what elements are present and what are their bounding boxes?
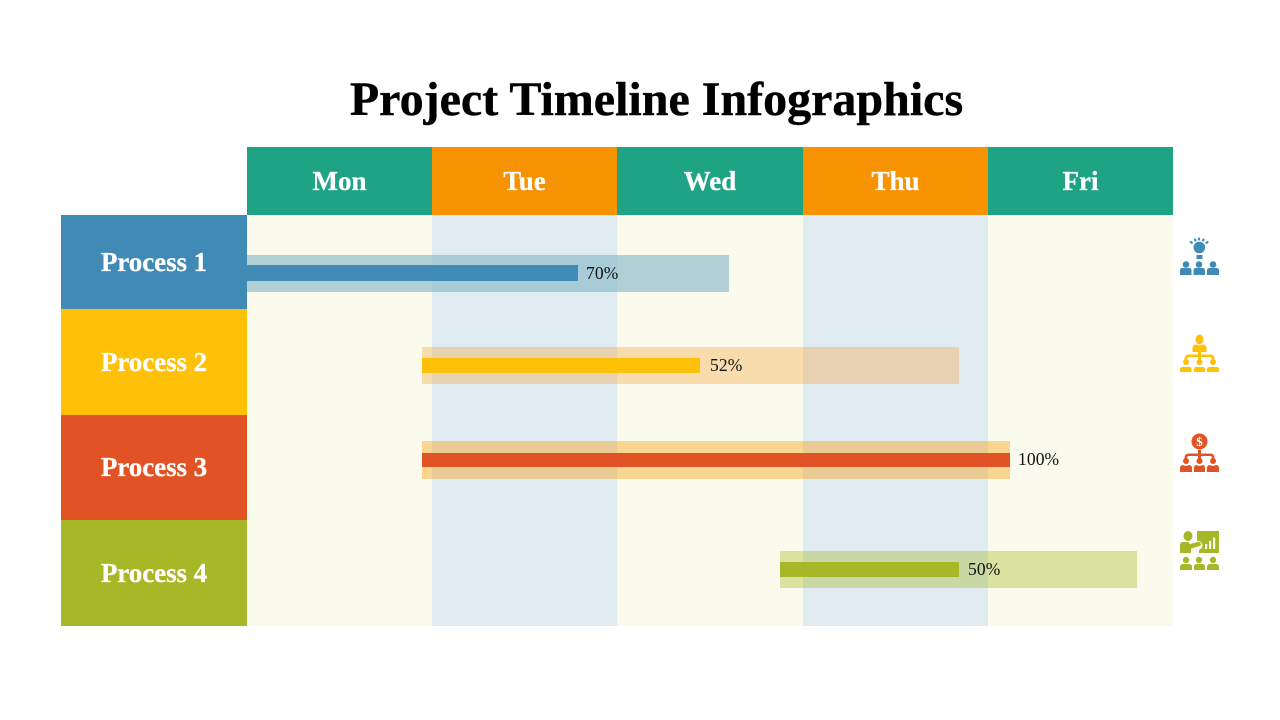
header: Thu xyxy=(803,147,988,215)
row label: Process 3 xyxy=(61,415,247,520)
Process 2 progress bar xyxy=(422,358,700,373)
timeline grid background xyxy=(247,215,1173,626)
header: Wed: Wed xyxy=(684,166,736,196)
icon: lightbulb over team xyxy=(1180,237,1219,275)
row label: Process 2 xyxy=(61,309,247,415)
Process 4 progress bar xyxy=(780,562,959,577)
header: Fri xyxy=(988,147,1173,215)
icon: presenter with chart and audience xyxy=(1180,531,1219,570)
Process 3 planned bar xyxy=(422,441,1010,479)
Process 1 planned bar xyxy=(247,255,729,292)
row label: Process 1: Process 1 xyxy=(101,246,207,276)
header: Mon xyxy=(247,147,432,215)
Process 1 progress bar xyxy=(247,265,578,281)
header: Wed xyxy=(617,147,803,215)
Process 4 percentage: 50% xyxy=(968,559,1000,579)
Process 1 percentage: 70% xyxy=(586,263,618,283)
row label: Process 4 xyxy=(61,520,247,626)
icon: hierarchy of people xyxy=(1180,334,1219,372)
row label: Process 3: Process 3 xyxy=(101,452,207,482)
Process 3 progress bar xyxy=(422,453,1010,467)
Process 2 planned bar xyxy=(422,347,959,384)
header: Mon: Mon xyxy=(312,166,366,196)
Process 2 percentage: 52% xyxy=(710,355,742,375)
header: Tue: Tue xyxy=(503,166,546,196)
header: Fri: Fri xyxy=(1062,166,1098,196)
header: Thu: Thu xyxy=(871,166,920,196)
Process 4 planned bar xyxy=(780,551,1137,588)
row label: Process 1 xyxy=(61,215,247,309)
Tuesday column stripe xyxy=(432,215,617,626)
icon: dollar hierarchy xyxy=(1180,434,1219,472)
header: Tue xyxy=(432,147,617,215)
Process 3 percentage: 100% xyxy=(1018,449,1059,469)
Thursday column stripe xyxy=(803,215,988,626)
row label: Process 2: Process 2 xyxy=(101,346,207,376)
row label: Process 4: Process 4 xyxy=(101,558,207,588)
icon: dollar hierarchy: $ xyxy=(1196,434,1203,449)
title: Project Timeline Infographics xyxy=(350,73,963,126)
